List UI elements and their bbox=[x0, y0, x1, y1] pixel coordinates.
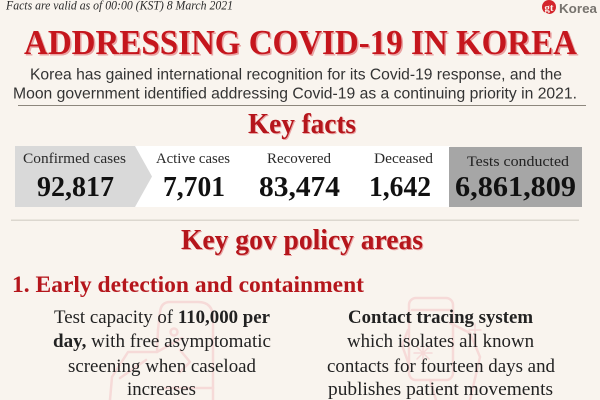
policy text: test capacity bbox=[53, 307, 271, 400]
stat: recovered bbox=[259, 151, 340, 203]
policy text: contact tracing: which isolates all known bbox=[347, 331, 534, 352]
stat: confirmed cases: Confirmed cases bbox=[23, 151, 126, 167]
title: ADDRESSING COVID-19 IN KOREA bbox=[26, 24, 579, 64]
intro paragraph: Korea has gained international recognition for its Covid-19 response, and the bbox=[30, 66, 562, 84]
stat: active cases: 7,701 bbox=[163, 172, 225, 203]
policy text: contact tracing bbox=[327, 307, 555, 400]
stat: tests conducted bbox=[449, 147, 582, 207]
stat: deceased: Deceased bbox=[374, 151, 434, 167]
heading: key gov policy areas: Key gov policy areas bbox=[182, 226, 424, 257]
stat: deceased bbox=[369, 151, 434, 203]
stat: deceased: 1,642 bbox=[369, 172, 431, 203]
logo: GT Korea: Korea bbox=[559, 2, 598, 16]
policy text: test capacity: Test capacity of 110,000 per bbox=[54, 307, 271, 328]
intro paragraph bbox=[13, 66, 577, 102]
heading: key gov policy areas: Key gov policy areas bbox=[181, 225, 423, 256]
policy text: contact tracing: contacts for fourteen days and bbox=[327, 356, 555, 377]
key facts strip bbox=[15, 146, 582, 207]
stat: tests conducted: Tests conducted bbox=[467, 154, 570, 170]
icon: phone contact tracing bbox=[402, 298, 481, 400]
heading: key facts: Key facts bbox=[248, 109, 356, 140]
logo: GT Korea bbox=[542, 0, 598, 16]
logo: GT Korea: gt bbox=[544, 2, 554, 14]
stat: tests conducted: 6,861,809 bbox=[455, 172, 576, 203]
policy text: test capacity: increases bbox=[127, 379, 196, 400]
stat: active cases: Active cases bbox=[156, 151, 230, 167]
heading: key facts: Key facts bbox=[249, 110, 357, 141]
stat: recovered: Recovered bbox=[267, 151, 331, 167]
policy text: test capacity: day, with free asymptomatic bbox=[53, 331, 271, 352]
icon: nasal swab test bbox=[110, 302, 213, 400]
stat: active cases bbox=[156, 151, 230, 203]
title: ADDRESSING COVID-19 IN KOREA bbox=[24, 23, 578, 62]
stat: recovered: 83,474 bbox=[259, 172, 340, 203]
policy text: contact tracing: publishes patient movements bbox=[328, 379, 553, 400]
intro paragraph: Moon government identified addressing Covid-19 as a continuing priority in 2021. bbox=[13, 86, 577, 102]
policy text: contact tracing: Contact tracing system bbox=[348, 307, 533, 328]
subheading: early detection and containment: 1. Early detection and containment bbox=[12, 272, 364, 298]
policy text: test capacity: screening when caseload bbox=[68, 356, 256, 377]
stat: confirmed cases bbox=[15, 146, 152, 207]
stat: confirmed cases: 92,817 bbox=[37, 172, 114, 203]
